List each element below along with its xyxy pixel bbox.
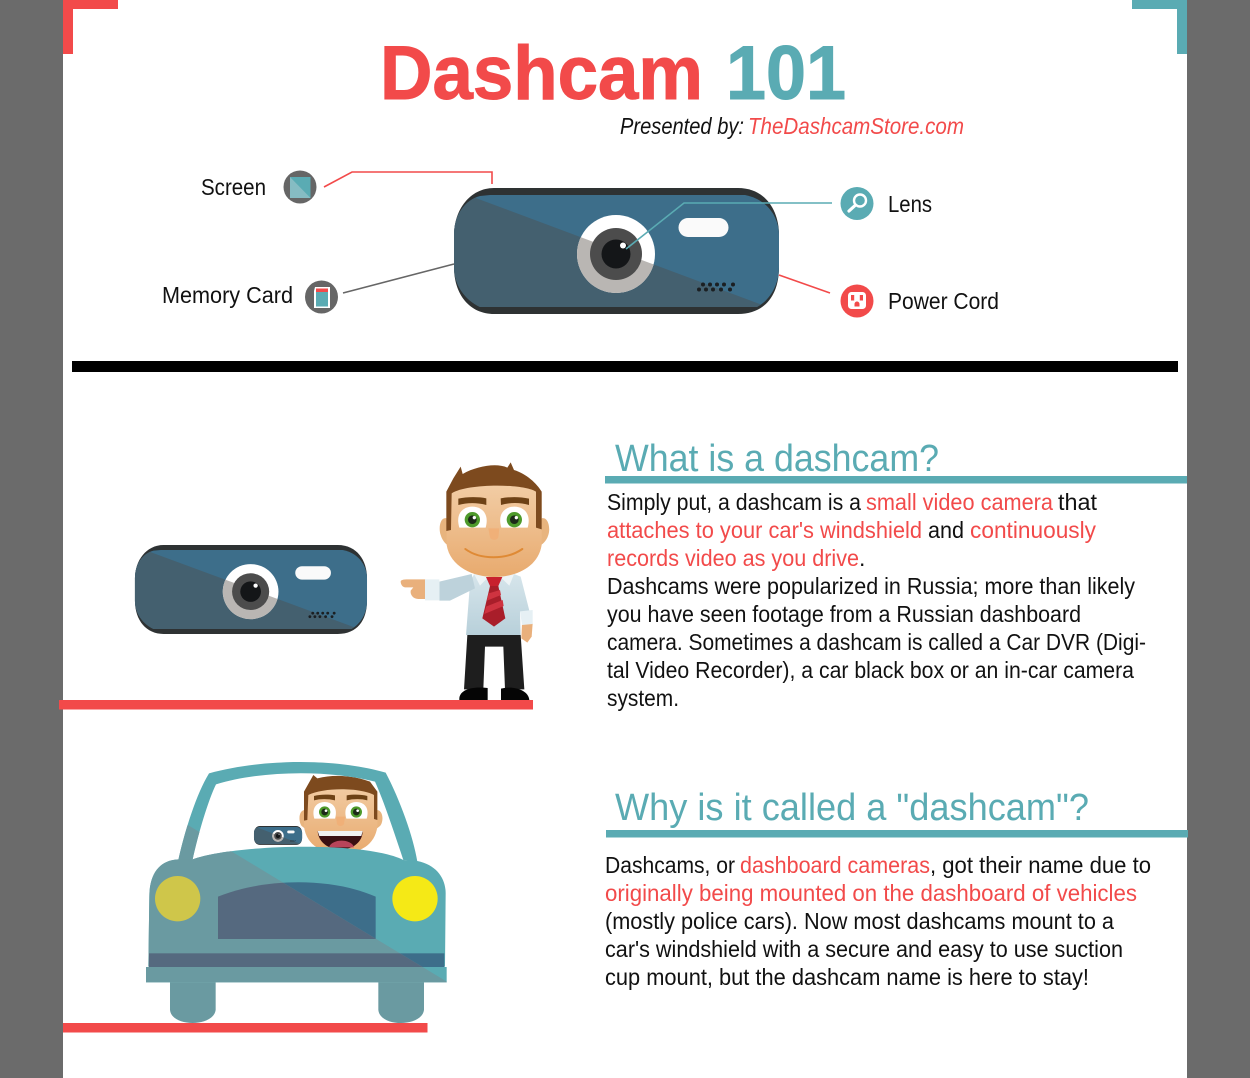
teal corner bracket [1132,0,1187,54]
right gray margin [1187,0,1250,1078]
man: ears [440,518,549,546]
teal heading rule [606,830,1188,838]
driver: open mouth [318,831,363,849]
paragraph: what is a dashcam: system. [607,685,679,711]
car body [148,847,446,967]
paragraph: why is it called a dashcam: , got their name due to [930,852,1151,878]
teal heading rule [605,476,1187,484]
car bumper [146,967,447,982]
title: 101 [726,31,846,116]
paragraph: what is a dashcam: continuously [970,517,1096,543]
paragraph: what is a dashcam: . [859,545,865,571]
icon: power outlet [840,284,874,318]
dashcam on car dashboard [254,826,302,845]
driver: face [304,778,377,853]
icon: memory card [305,280,338,314]
car grille [218,882,376,939]
label: memory card: Memory Card [162,282,293,308]
man: hair [446,462,542,531]
car headlight right [392,876,438,921]
paragraph: what is a dashcam [607,489,1146,711]
callout line: screen [324,172,492,187]
man: cuffs [425,579,533,625]
man: collar [473,573,515,586]
man: right hand [521,623,533,643]
man: shirt [466,574,529,635]
red ground line under man [59,700,533,710]
heading: why is it called a dashcam: Why is it called a "dashcam"? [615,787,1089,829]
car headlight left [155,876,200,921]
paragraph: what is a dashcam: and [928,517,964,543]
main dashcam diagram [454,188,779,314]
man: shoes [459,688,529,700]
paragraph: what is a dashcam: records video as you drive [607,545,859,571]
paragraph: what is a dashcam: Simply put, a dashcam is a [607,489,861,515]
paragraph: what is a dashcam: you have seen footage from a Russian dashboard [607,601,1081,627]
heading: what is a dashcam: What is a dashcam? [615,438,939,480]
title: Dashcam [380,31,703,116]
black divider bar [72,361,1178,372]
driver: eyes [313,802,368,819]
man: nose [488,528,499,540]
icon: lens magnifier [840,187,874,220]
presenter credit: Presented by: [620,113,744,139]
paragraph: why is it called a dashcam: originally being mounted on the dashboard of vehicles [605,880,1137,906]
paragraph: why is it called a dashcam: cup mount, but the dashcam name is here to stay! [605,964,1089,990]
label: lens: Lens [888,191,932,217]
man: tie [482,577,505,627]
paragraph: why is it called a dashcam: (mostly police cars). Now most dashcams mount to a [605,908,1114,934]
driver: eyebrows [314,795,367,800]
man: pointing hand [401,579,425,599]
paragraph: why is it called a dashcam: dashboard cameras [740,852,930,878]
paragraph: what is a dashcam: small video camera [866,489,1053,515]
man: smile [465,549,522,557]
paragraph: what is a dashcam: Dashcams were popularized in Russia; more than likely [607,573,1135,599]
paragraph: what is a dashcam: tal Video Recorder), a car black box or an in-car camera [607,657,1134,683]
red ground line under car [63,1023,428,1032]
man: legs [464,635,524,689]
car with driver illustration [146,762,447,1023]
paragraph: what is a dashcam: camera. Sometimes a dashcam is called a Car DVR (Digi- [607,629,1146,655]
callout line: power cord [779,275,830,293]
car bumper band [149,953,444,967]
driver: ears [299,810,382,830]
car wheels [170,982,424,1023]
cartoon man pointing [401,462,549,700]
man: pointing arm [439,574,475,601]
label: power cord: Power Cord [888,288,999,314]
paragraph: why is it called a dashcam: car's windshield with a secure and easy to use suction [605,936,1123,962]
driver: hair [304,775,377,821]
callout line: lens [626,203,832,249]
presenter credit: TheDashcamStore.com [748,113,964,139]
left gray margin [0,0,63,1078]
car diagonal shading [146,825,447,982]
paragraph: why is it called a dashcam [605,852,1151,990]
presenter credit [620,113,964,139]
paragraph: what is a dashcam: that [1058,489,1098,515]
paragraph: what is a dashcam: attaches to your car's windshield [607,517,922,543]
red corner bracket [63,0,118,54]
driver: nose [336,817,345,826]
car roof and pillars [178,762,417,862]
callout line: memory card [343,264,454,293]
paragraph: why is it called a dashcam: Dashcams, or [605,852,735,878]
small dashcam illustration [135,545,367,634]
man: face [447,476,542,577]
icon: screen [284,170,316,204]
man: eyebrows [458,497,529,505]
man: eyes [458,507,529,528]
label: screen: Screen [201,174,266,200]
